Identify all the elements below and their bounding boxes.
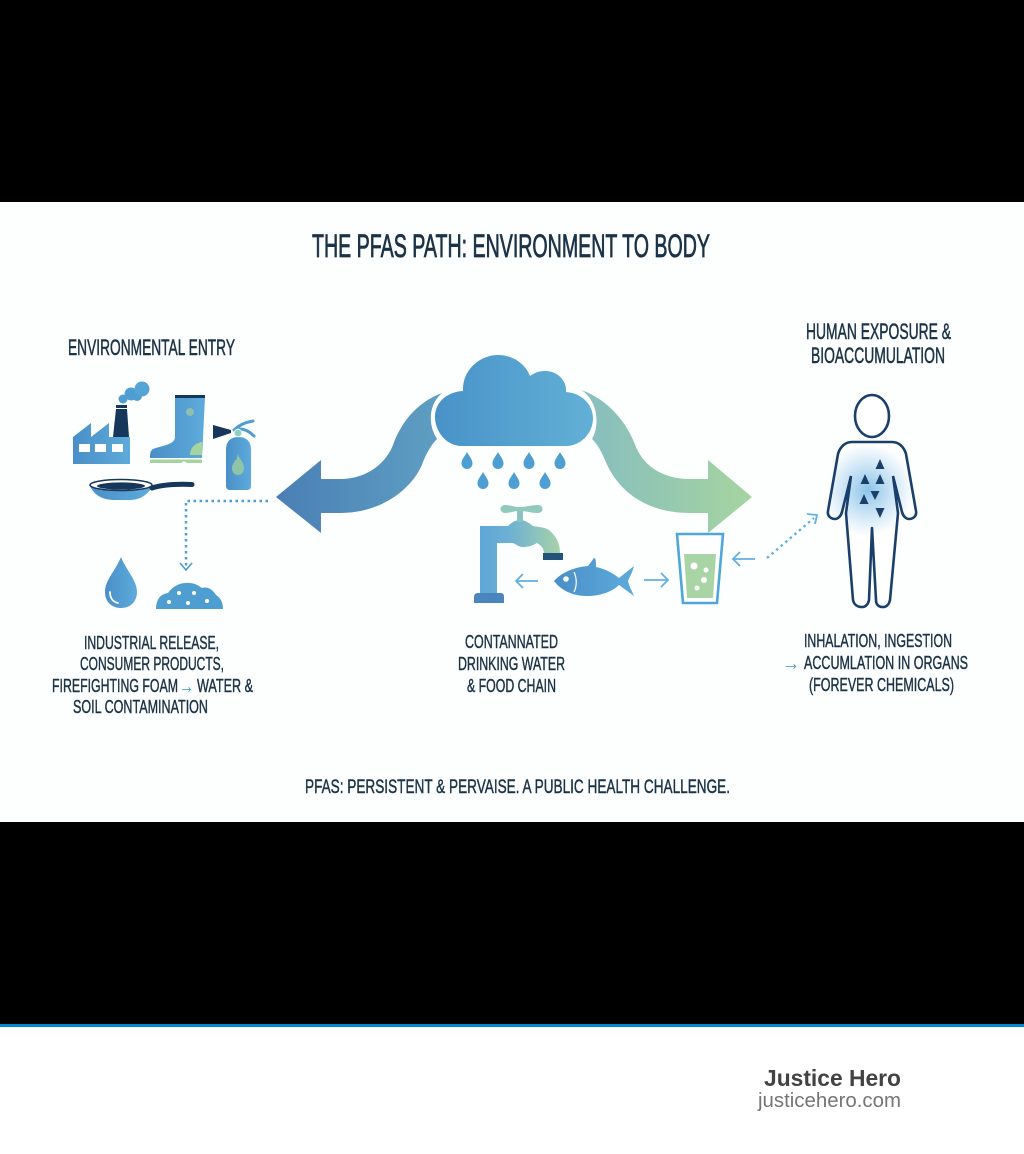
icon: soil mound [156, 583, 223, 609]
icon: rubber boot [150, 395, 205, 463]
arrow: left curved flow [276, 393, 442, 533]
heading: human exposure and bioaccumulation [806, 319, 951, 368]
title: THE PFAS PATH: ENVIRONMENT TO BODY [312, 228, 710, 264]
icon: glass of water [677, 534, 723, 603]
arrow: fish to glass [644, 573, 668, 587]
arrow: right curved flow [581, 390, 752, 533]
closing statement: PFAS: PERSISTENT & PERVAISE. A PUBLIC HEALTH CHALLENGE. [305, 777, 730, 798]
footer brand [757, 1065, 901, 1112]
icon: rain drops [462, 452, 566, 489]
arrow: fish to faucet [516, 574, 538, 588]
footer background [0, 1027, 1024, 1154]
text block: environmental entry description: SOIL CONTAMINATION [73, 696, 208, 717]
icon: rain cloud [435, 355, 593, 446]
text block: contaminated water description [458, 631, 565, 696]
infographic panel background [0, 202, 1024, 822]
text block: contaminated water description: & FOOD CHAIN [467, 675, 556, 696]
icon: factory [73, 382, 150, 464]
text block: human exposure description: (FOREVER CHEMICALS) [809, 674, 954, 695]
text block: human exposure description: INHALATION, INGESTION [804, 630, 952, 651]
text block: environmental entry description [52, 632, 253, 717]
footer accent line [0, 1024, 1024, 1027]
top black band [0, 0, 1024, 202]
dotted arrow: products to water and soil [180, 501, 268, 570]
text block: contaminated water description: DRINKING WATER [458, 653, 565, 674]
text block: environmental entry description: FIREFIGHTING FOAM [52, 675, 178, 696]
footer brand: Justice Hero [764, 1065, 901, 1091]
icon: fire extinguisher [213, 421, 254, 490]
icon: water drop [105, 557, 137, 608]
icon: fish [554, 558, 634, 596]
text block: environmental entry description: → [179, 673, 194, 698]
arrow: person to glass [733, 552, 755, 566]
text block: environmental entry description: INDUSTRIAL RELEASE, [84, 632, 219, 653]
heading: human exposure and bioaccumulation: BIOACCUMULATION [811, 343, 945, 368]
icon: frying pan [90, 480, 192, 500]
icon: human figure with bioaccumulation [828, 395, 916, 607]
heading: environmental entry: ENVIRONMENTAL ENTRY [68, 335, 235, 360]
dotted arrow: glass to person [767, 514, 817, 558]
icon: faucet [474, 505, 563, 603]
bottom black band [0, 822, 1024, 1024]
text block: environmental entry description: CONSUMER PRODUCTS, [80, 653, 224, 674]
text block: human exposure description: → [782, 650, 800, 675]
text block: human exposure description [782, 630, 968, 695]
text block: environmental entry description: WATER & [197, 675, 253, 696]
footer brand: justicehero.com [757, 1090, 901, 1112]
text block: contaminated water description: CONTANNATED [465, 631, 558, 652]
